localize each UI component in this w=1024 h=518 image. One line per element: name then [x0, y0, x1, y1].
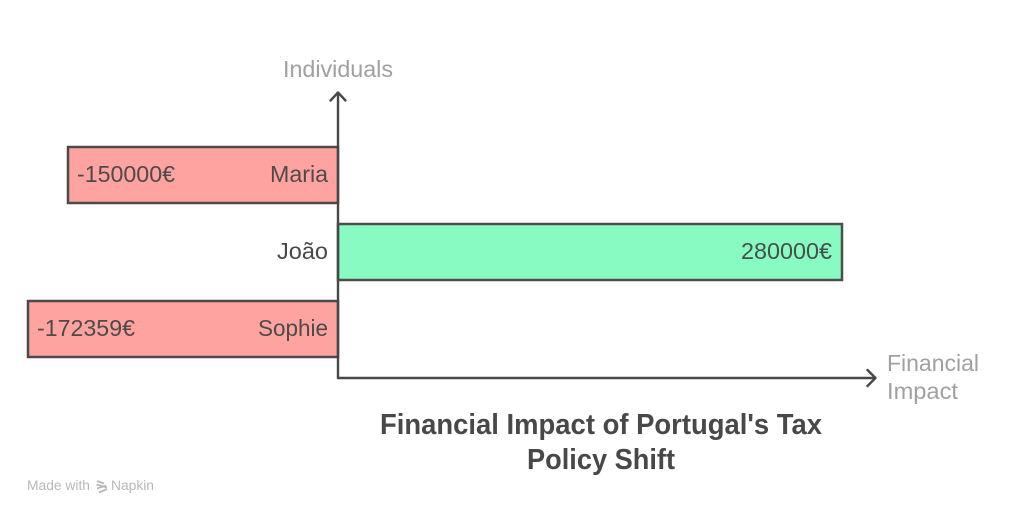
name: João: João — [277, 238, 328, 264]
x-axis label: Financial — [887, 350, 979, 376]
y-axis label: Individuals — [283, 56, 393, 82]
value: João: 280000€ — [741, 238, 832, 264]
watermark — [27, 478, 154, 493]
x-axis label: Impact — [887, 378, 958, 404]
name: Maria: Maria — [270, 161, 329, 187]
title — [380, 409, 822, 476]
bar: João — [338, 224, 842, 280]
axes with arrows — [330, 92, 876, 386]
icon: napkin logo — [96, 481, 107, 492]
title: Policy Shift — [527, 444, 675, 476]
bar: Maria — [68, 147, 338, 203]
watermark: Made with — [27, 478, 90, 493]
bar: Sophie — [28, 301, 338, 357]
value: Maria: -150000€ — [77, 161, 175, 187]
watermark: Napkin — [111, 478, 154, 493]
name: Sophie: Sophie — [258, 315, 328, 341]
value: Sophie: -172359€ — [37, 315, 135, 341]
x-axis label — [887, 350, 979, 404]
title: Financial Impact of Portugal's Tax — [380, 409, 822, 441]
